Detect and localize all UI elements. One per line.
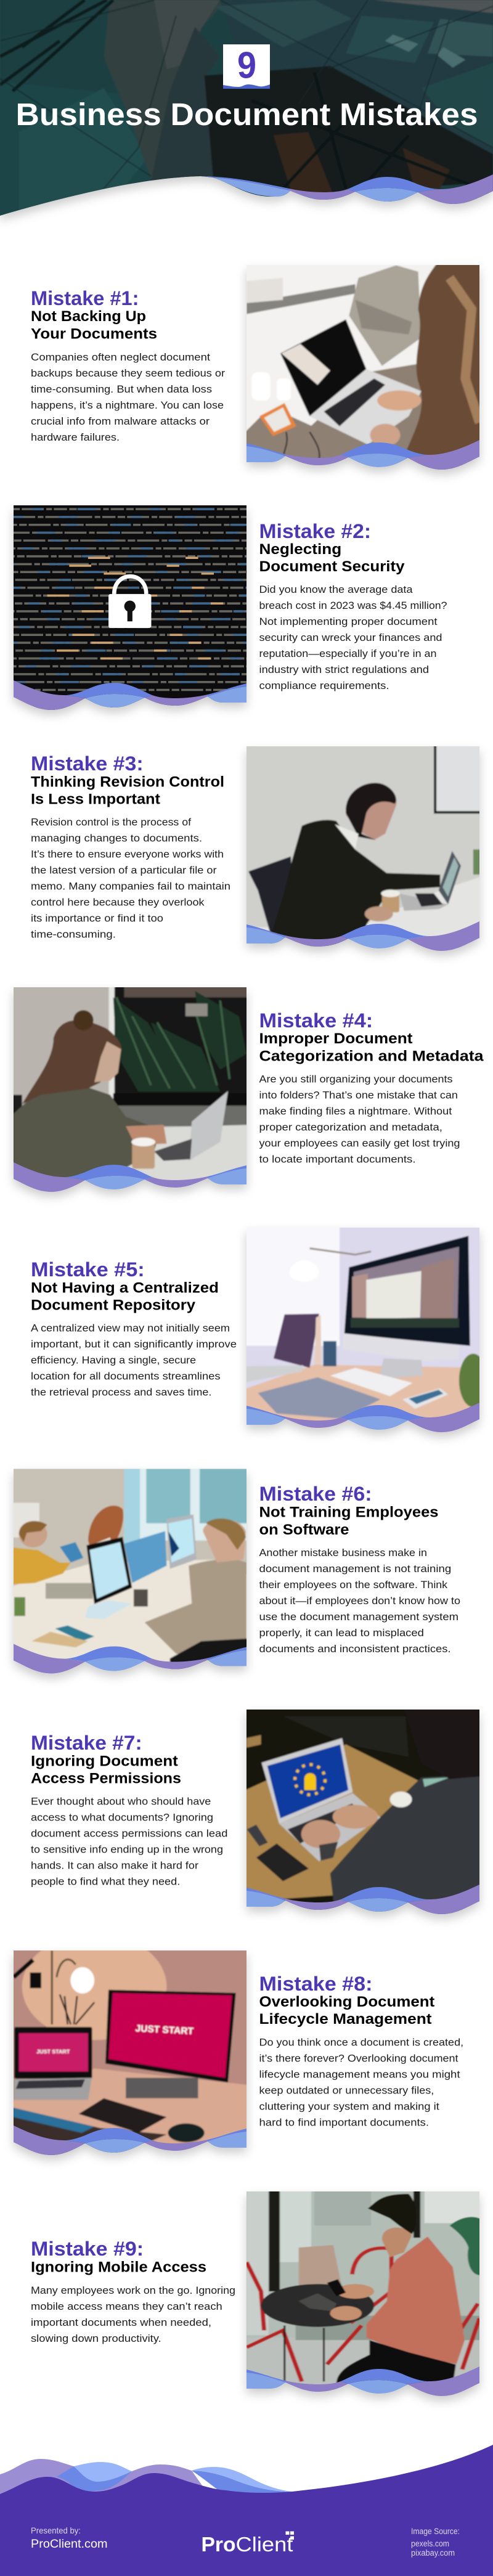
body text 7: people to find what they need.	[31, 1876, 180, 1888]
body text 6: their employees on the software. Think	[259, 1579, 448, 1591]
heading 2	[259, 520, 405, 575]
heading 8: Mistake #8:	[259, 1973, 372, 1995]
body text 8: cluttering your system and making it	[259, 2100, 439, 2112]
body text 1: Companies often neglect document	[31, 351, 210, 363]
body text 3: Revision control is the process of	[31, 816, 191, 828]
image card 6	[6, 1462, 255, 1682]
panel: mistake 1	[31, 259, 487, 476]
body text 6	[259, 1547, 460, 1655]
screen text: JUST START	[135, 2023, 194, 2037]
body text 9: Many employees work on the go. Ignoring	[31, 2285, 235, 2296]
heading 4: Improper Document	[259, 1030, 413, 1047]
heading 7: Access Permissions	[31, 1770, 181, 1787]
image card 8	[9, 1950, 251, 2164]
heading 2: Neglecting	[259, 541, 341, 558]
body text 8: Do you think once a document is created,	[259, 2036, 463, 2048]
header shadow	[0, 0, 493, 216]
body text 3: the latest version of a particular file or	[31, 864, 217, 876]
header photo: glass buildings	[0, 0, 493, 233]
body text 2: industry with strict regulations and	[259, 664, 429, 675]
body text 1: happens, it’s a nightmare. You can lose	[31, 399, 224, 411]
heading 5: Mistake #5:	[31, 1258, 145, 1281]
image card 1	[239, 259, 487, 476]
body text 6: about it—if employees don’t know how to	[259, 1595, 460, 1607]
heading 1: Your Documents	[31, 325, 157, 343]
heading 6: on Software	[259, 1522, 349, 1538]
body text 3: time-consuming.	[31, 928, 116, 940]
heading 7	[31, 1732, 181, 1787]
heading 6: Not Training Employees	[259, 1504, 439, 1521]
heading 3: Thinking Revision Control	[31, 774, 224, 790]
body text 3: managing changes to documents.	[31, 832, 202, 844]
panel: mistake 5	[31, 1220, 487, 1443]
body text 8: lifecycle management means you might	[259, 2068, 460, 2080]
title: Business Document Mistakes	[16, 97, 478, 132]
body text 3: It’s there to ensure everyone works with	[31, 848, 224, 860]
panel: mistake 7	[31, 1703, 487, 1927]
body text 5: A centralized view may not initially seem	[31, 1323, 230, 1334]
body text 2: Not implementing proper document	[259, 616, 438, 627]
body text 4: your employees can easily get lost trying	[259, 1138, 460, 1149]
body text 8: hard to find important documents.	[259, 2116, 429, 2128]
body text 2: reputation—especially if you’re in an	[259, 648, 436, 659]
body text 9	[31, 2285, 235, 2344]
footer band	[0, 2445, 493, 2576]
body text 2: compliance requirements.	[259, 680, 389, 691]
body text 8: it’s there forever? Overlooking document	[259, 2052, 458, 2064]
image card 5	[239, 1220, 487, 1443]
body text 9: important documents when needed,	[31, 2317, 211, 2328]
body text 5: location for all documents streamlines	[31, 1371, 221, 1382]
body text 8	[259, 2036, 463, 2128]
heading 7: Mistake #7:	[31, 1732, 142, 1754]
body text 5: important, but it can significantly improve	[31, 1339, 237, 1350]
heading 3: Is Less Important	[31, 791, 160, 807]
heading 4	[259, 1009, 484, 1064]
body text 7	[31, 1796, 227, 1888]
heading 9: Ignoring Mobile Access	[31, 2259, 206, 2275]
body text 3: its importance or find it too	[31, 912, 163, 924]
body text 6: properly, it can lead to misplaced	[259, 1627, 424, 1639]
body text 7: hands. It can also make it hard for	[31, 1860, 198, 1872]
body text 2: Did you know the average data	[259, 584, 413, 595]
body text 4: to locate important documents.	[259, 1154, 415, 1165]
image card 8: JUST START	[36, 2048, 70, 2055]
body text 1	[31, 351, 225, 443]
image card 4	[6, 982, 255, 1202]
padlock	[114, 576, 146, 594]
heading 5	[31, 1258, 219, 1314]
heading 5: Document Repository	[31, 1297, 195, 1314]
body text 1: crucial info from malware attacks or	[31, 415, 210, 427]
body text 2: breach cost in 2023 was $4.45 million?	[259, 600, 447, 611]
body text 3: memo. Many companies fail to maintain	[31, 880, 230, 892]
body text 4: proper categorization and metadata,	[259, 1122, 442, 1133]
image source	[411, 2527, 460, 2558]
presented by	[31, 2525, 107, 2551]
presented by: ProClient.com	[31, 2538, 107, 2551]
heading 2: Mistake #2:	[259, 520, 371, 542]
body text 7: Ever thought about who should have	[31, 1796, 211, 1808]
panel: mistake 4	[6, 982, 484, 1202]
image card 9	[239, 2187, 487, 2406]
heading 1	[31, 287, 157, 343]
logo: ProClient	[201, 2533, 293, 2556]
body text 2	[259, 584, 447, 691]
body text 6: document management is not training	[259, 1563, 451, 1575]
body text 1: backups because they seem tedious or	[31, 367, 225, 379]
image card 7	[239, 1703, 487, 1927]
body text 6: Another mistake business make in	[259, 1547, 427, 1559]
heading 9	[31, 2238, 206, 2275]
heading 5: Not Having a Centralized	[31, 1279, 219, 1296]
heading 3	[31, 752, 224, 807]
body text 1: time-consuming. But when data loss	[31, 383, 212, 395]
body text 2: security can wreck your finances and	[259, 632, 442, 643]
panel: mistake 2	[0, 498, 447, 715]
body text 6: use the document management system	[259, 1611, 458, 1623]
heading 1: Mistake #1:	[31, 287, 139, 309]
body text 7: access to what documents? Ignoring	[31, 1812, 213, 1824]
image source: pixabay.com	[411, 2548, 455, 2558]
heading 8	[259, 1973, 434, 2028]
body text 4	[259, 1074, 460, 1165]
panel: mistake 8	[9, 1950, 462, 2164]
body text 9: mobile access means they can’t reach	[31, 2301, 222, 2312]
panel: mistake 9	[31, 2187, 487, 2406]
body text 6: documents and inconsistent practices.	[259, 1643, 451, 1655]
image source: pexels.com	[411, 2539, 449, 2548]
heading 3: Mistake #3:	[31, 752, 144, 775]
heading 7: Ignoring Document	[31, 1753, 178, 1769]
image card 3	[239, 740, 487, 960]
number badge: 9	[237, 44, 256, 86]
body text 5	[31, 1323, 237, 1398]
body text 4: Are you still organizing your documents	[259, 1074, 452, 1085]
heading 9: Mistake #9:	[31, 2238, 144, 2260]
heading 8: Overlooking Document	[259, 1994, 434, 2010]
body text 3	[31, 816, 230, 940]
heading 6	[259, 1483, 439, 1538]
body text 7: document access permissions can lead	[31, 1828, 227, 1840]
heading 6: Mistake #6:	[259, 1483, 372, 1505]
body text 3: control here because they overlook	[31, 896, 205, 908]
header banner	[0, 0, 493, 233]
body text 9: slowing down productivity.	[31, 2333, 161, 2344]
heading 4: Mistake #4:	[259, 1009, 373, 1032]
heading 4: Categorization and Metadata	[259, 1048, 484, 1064]
body text 8: keep outdated or unnecessary files,	[259, 2084, 434, 2096]
body text 1: hardware failures.	[31, 431, 120, 443]
number badge	[223, 44, 270, 89]
panel: mistake 3	[31, 740, 487, 960]
image source: Image Source:	[411, 2527, 460, 2536]
image card 2	[0, 498, 255, 715]
heading 8: Lifecycle Management	[259, 2011, 431, 2028]
heading 2: Document Security	[259, 558, 405, 575]
footer waves	[0, 2459, 292, 2496]
body text 7: to sensitive info ending up in the wrong	[31, 1844, 223, 1856]
footer	[0, 2445, 493, 2576]
body text 4: make finding files a nightmare. Without	[259, 1106, 452, 1117]
header wave	[201, 174, 493, 204]
presented by: Presented by:	[31, 2525, 81, 2535]
body text 5: the retrieval process and saves time.	[31, 1387, 211, 1398]
body text 5: efficiency. Having a single, secure	[31, 1355, 196, 1366]
heading 1: Not Backing Up	[31, 308, 146, 325]
panel: mistake 6	[6, 1462, 460, 1682]
body text 4: into folders? That’s one mistake that can	[259, 1090, 458, 1101]
